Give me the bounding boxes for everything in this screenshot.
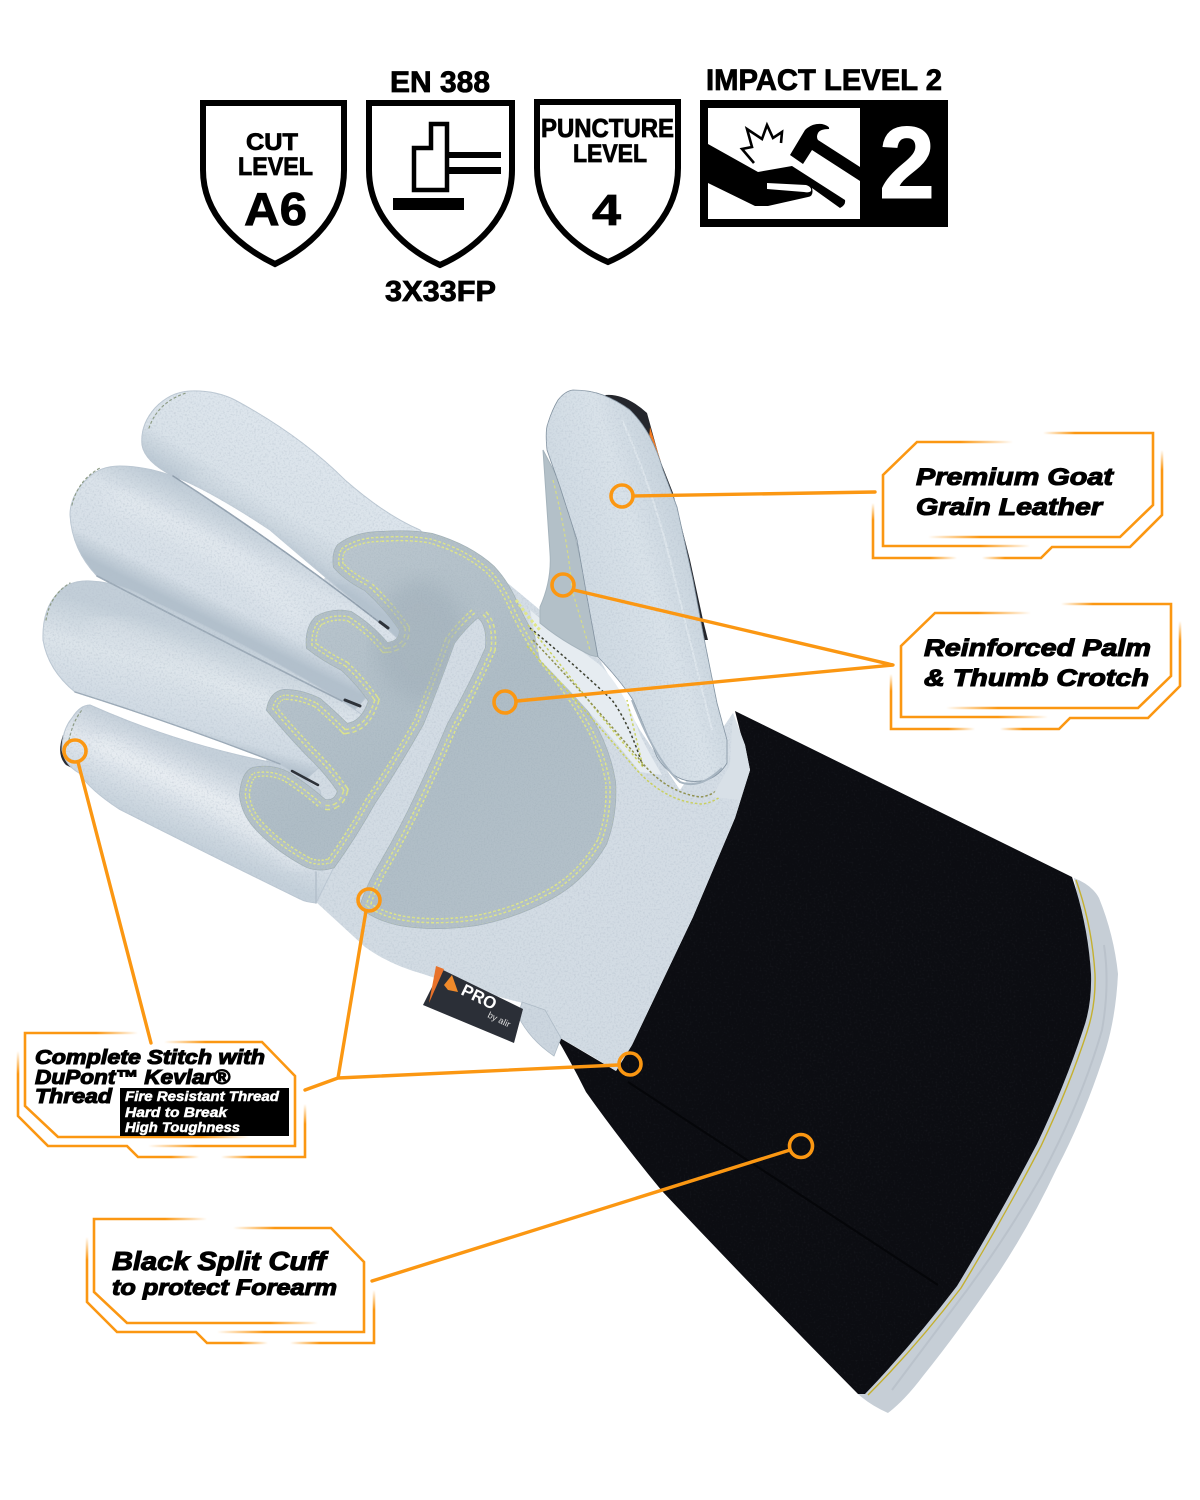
leader: black split cuff — [372, 1134, 812, 1281]
fingers: creases and shadows — [46, 393, 383, 903]
callout: black split cuff: to protect Forearm — [112, 1275, 337, 1300]
certification badges — [203, 64, 948, 308]
thread properties box: Fire Resistant Thread — [125, 1089, 280, 1104]
badge: puncture level 4: LEVEL — [573, 140, 647, 168]
finger: ring — [43, 581, 370, 785]
leader: Kevlar stitching — [64, 740, 641, 1090]
badge: puncture level 4 — [537, 102, 678, 262]
thumb back: dark armour — [605, 395, 708, 640]
glove photo — [43, 390, 1118, 1413]
badge: EN 388 — [369, 66, 512, 308]
leader lines and markers — [64, 485, 893, 1281]
little finger back: dark patch — [60, 735, 80, 772]
badge: impact level 2 — [700, 64, 948, 227]
callout: complete stitch with DuPont Kevlar thread — [18, 1033, 305, 1157]
thread properties box — [120, 1088, 289, 1136]
thumb: suede web — [540, 450, 598, 657]
palm: leather body — [260, 530, 750, 1071]
callout: premium goat grain leather — [873, 433, 1162, 558]
finger: index — [142, 391, 480, 660]
badge: cut level A6: CUT — [246, 129, 298, 156]
palm: thumb base strip with stitching — [516, 600, 743, 804]
thumb back: orange accent — [649, 427, 661, 464]
label tag: XPRO by alir — [423, 966, 523, 1043]
suede: double stitching — [240, 531, 616, 928]
badge: impact level 2: IMPACT LEVEL 2 — [706, 64, 942, 97]
thumb: goat grain leather — [546, 390, 727, 784]
badge: puncture level 4: 4 — [592, 186, 622, 235]
icon: hand — [708, 144, 845, 208]
icon: hammer — [790, 124, 860, 181]
badge: EN 388: 3X33FP — [385, 276, 496, 308]
leader: goat grain leather — [611, 485, 875, 507]
callout: complete stitch with DuPont Kevlar thread: DuPont™ Kevlar® — [35, 1067, 230, 1089]
palm: suede reinforcement patch — [239, 530, 616, 929]
badge: cut level A6: LEVEL — [238, 153, 313, 181]
cuff: black split leather with grey binding — [550, 700, 1118, 1413]
thread properties box: Hard to Break — [125, 1105, 229, 1120]
label tag: XPRO by alir: by alir — [486, 1010, 512, 1029]
callout: black split cuff: Black Split Cuff — [112, 1246, 329, 1276]
icon: impact spark — [742, 125, 782, 163]
finger slits — [292, 622, 388, 785]
callout: reinforced palm and thumb crotch: Reinforced Palm — [924, 635, 1151, 662]
badge: impact level 2: 2 — [879, 106, 935, 220]
finger: middle — [70, 466, 410, 715]
badge: EN 388: EN 388 — [390, 66, 490, 99]
leader: palm and thumb crotch — [494, 574, 893, 713]
callout: complete stitch with DuPont Kevlar thread: Complete Stitch with — [35, 1047, 265, 1069]
badge: cut level A6: A6 — [244, 183, 307, 235]
badge: puncture level 4: PUNCTURE — [541, 113, 674, 143]
leather hand: palm and fingers — [43, 391, 750, 1071]
callout: complete stitch with DuPont Kevlar thread: Thread — [35, 1086, 113, 1108]
wrist: thumb base band — [712, 713, 750, 800]
badge: cut level A6 — [203, 103, 344, 264]
palm: wrist fold — [518, 1002, 561, 1056]
callout: premium goat grain leather: Premium Goat — [916, 464, 1114, 491]
callout: black split cuff — [87, 1219, 374, 1343]
callout: reinforced palm and thumb crotch — [891, 604, 1180, 729]
finger: little — [62, 705, 334, 903]
callout: reinforced palm and thumb crotch: & Thumb Crotch — [924, 665, 1149, 692]
label tag: XPRO by alir: PRO — [458, 981, 500, 1014]
callout: premium goat grain leather: Grain Leather — [916, 494, 1104, 521]
thread properties box: High Toughness — [125, 1120, 241, 1135]
